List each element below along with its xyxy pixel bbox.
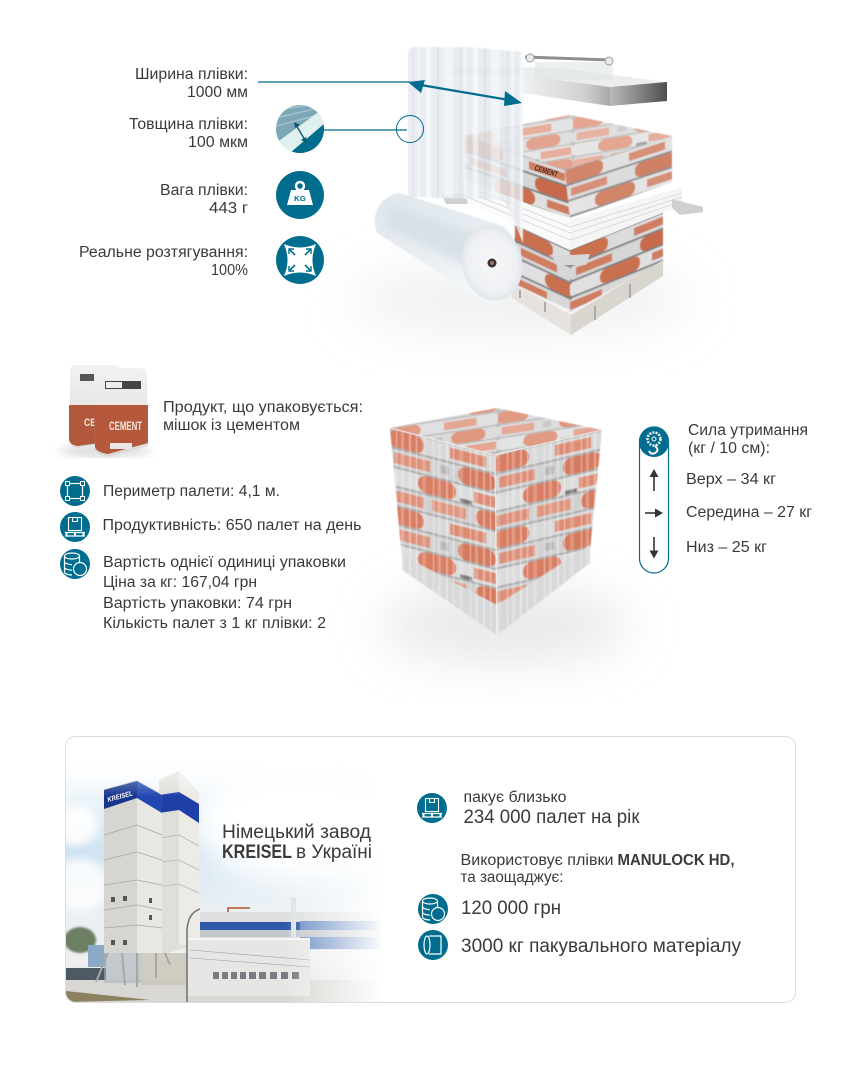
text: real stretch: Реальне розтягування: xyxy=(79,244,248,261)
icon: weight: KG xyxy=(294,194,306,203)
background factory xyxy=(200,897,380,950)
text: film weight: 443 г xyxy=(209,200,248,217)
cube faces xyxy=(390,408,602,635)
text: real stretch xyxy=(79,244,248,279)
text: holding force: Середина – 27 кг xyxy=(686,504,812,521)
lower bag stack xyxy=(513,212,663,312)
thickness leader with magnifier circle xyxy=(324,116,424,142)
plastic tray around stack xyxy=(442,177,703,265)
illustration: cement bags xyxy=(59,365,151,457)
width double arrow xyxy=(408,80,522,106)
text: plant heading: Німецький завод xyxy=(222,822,371,843)
text: unit packaging cost: Ціна за кг: 167,04 грн xyxy=(103,574,257,591)
trees xyxy=(64,927,96,953)
icon: hook with gear xyxy=(639,427,669,457)
transparent film sheet xyxy=(408,47,523,243)
icon: pallet perimeter xyxy=(60,476,90,506)
plant photo xyxy=(66,771,380,1002)
white haze behind heading xyxy=(199,785,366,894)
roller bar xyxy=(525,54,614,80)
text: plant heading: KREISEL xyxy=(222,842,292,863)
icon: film roll xyxy=(418,930,448,960)
film roll xyxy=(375,193,529,306)
text: film weight xyxy=(160,182,248,217)
front bag: CEMENT xyxy=(109,419,142,433)
arrow right xyxy=(645,508,663,518)
text: packaged product: Продукт, що упаковується: xyxy=(163,399,363,416)
left low building xyxy=(66,945,106,980)
text: pallets per year: 234 000 палет на рік xyxy=(464,807,640,828)
icon: money saved xyxy=(418,894,448,924)
bag shadow xyxy=(59,445,151,457)
text: pallets per year xyxy=(464,789,640,828)
text: money saved: 120 000 грн xyxy=(461,898,561,919)
text: film width xyxy=(135,66,248,101)
fade to white, right xyxy=(289,838,385,1002)
arrow down xyxy=(650,537,658,558)
lamp post xyxy=(187,909,200,1002)
sky xyxy=(66,783,350,980)
text: pallets per year: пакує близько xyxy=(464,789,566,806)
text: uses MANULOCK HD xyxy=(460,852,734,886)
icon: pallet productivity xyxy=(60,512,90,542)
scene shadow xyxy=(350,262,690,338)
tower 2 xyxy=(159,771,199,955)
text: unit packaging cost xyxy=(103,554,346,632)
icon: weight xyxy=(276,171,324,219)
capsule outline xyxy=(640,427,668,573)
text: plant heading xyxy=(222,822,372,863)
ground xyxy=(66,980,345,1002)
text: film thickness xyxy=(129,116,248,151)
text: film width: 1000 мм xyxy=(187,84,248,101)
icon: pallets per year xyxy=(417,793,447,823)
cube shadow xyxy=(380,585,630,665)
back bag: CE xyxy=(84,417,96,429)
icon: coins xyxy=(60,549,90,579)
text: perimeter: Периметр палети: 4,1 м. xyxy=(103,483,280,500)
icon: stretch xyxy=(276,236,324,284)
text: plant heading: в Україні xyxy=(296,842,372,863)
text: packaged product: мішок із цементом xyxy=(163,417,300,434)
text: film thickness: Товщина плівки: xyxy=(129,116,248,133)
holding force capsule xyxy=(639,427,669,573)
text: material saved: 3000 кг пакувального матеріалу xyxy=(461,936,741,957)
tower 1: KREISEL xyxy=(107,790,134,804)
text: holding force xyxy=(686,422,812,556)
cube edge highlight xyxy=(390,428,602,635)
text: uses MANULOCK HD: та заощаджує: xyxy=(460,869,564,886)
width leader line xyxy=(258,81,410,83)
low white building xyxy=(188,938,310,996)
arrow up xyxy=(650,469,658,491)
upper bag stack xyxy=(465,115,672,218)
icon: film thickness xyxy=(276,105,324,153)
panel frame xyxy=(66,736,796,1002)
text: film weight: Вага плівки: xyxy=(160,182,248,199)
text: unit packaging cost: Вартість упаковки: 74 грн xyxy=(103,595,292,612)
text: productivity: Продуктивність: 650 палет на день xyxy=(102,517,362,534)
text: real stretch: 100% xyxy=(211,262,248,279)
text: packaged product xyxy=(163,399,363,434)
text: film width: Ширина плівки: xyxy=(135,66,248,83)
text: uses MANULOCK HD: MANULOCK HD, xyxy=(618,852,734,869)
cement label on upper stack: CEMENT xyxy=(533,163,559,179)
tower 1 xyxy=(104,780,162,953)
text: unit packaging cost: Вартість однієї одиниці упаковки xyxy=(103,554,346,571)
illustration: pallet wrapping scene xyxy=(258,47,703,338)
text: film thickness: 100 мкм xyxy=(188,134,248,151)
wooden pallet xyxy=(512,260,663,335)
text: holding force: Сила утримання xyxy=(688,422,808,439)
illustration: wrapped pallet cube xyxy=(380,408,630,665)
fade to white, top xyxy=(104,771,184,795)
tower legs xyxy=(96,953,188,987)
metal arm xyxy=(450,66,667,106)
text: holding force: Верх – 34 кг xyxy=(686,471,776,488)
text: uses MANULOCK HD: Використовує плівки xyxy=(460,852,614,869)
text: holding force: (кг / 10 см): xyxy=(688,440,770,457)
text: unit packaging cost: Кількість палет з 1 кг плівки: 2 xyxy=(103,615,326,632)
text: holding force: Низ – 25 кг xyxy=(686,539,767,556)
panel: KREISEL plant xyxy=(52,736,796,1002)
